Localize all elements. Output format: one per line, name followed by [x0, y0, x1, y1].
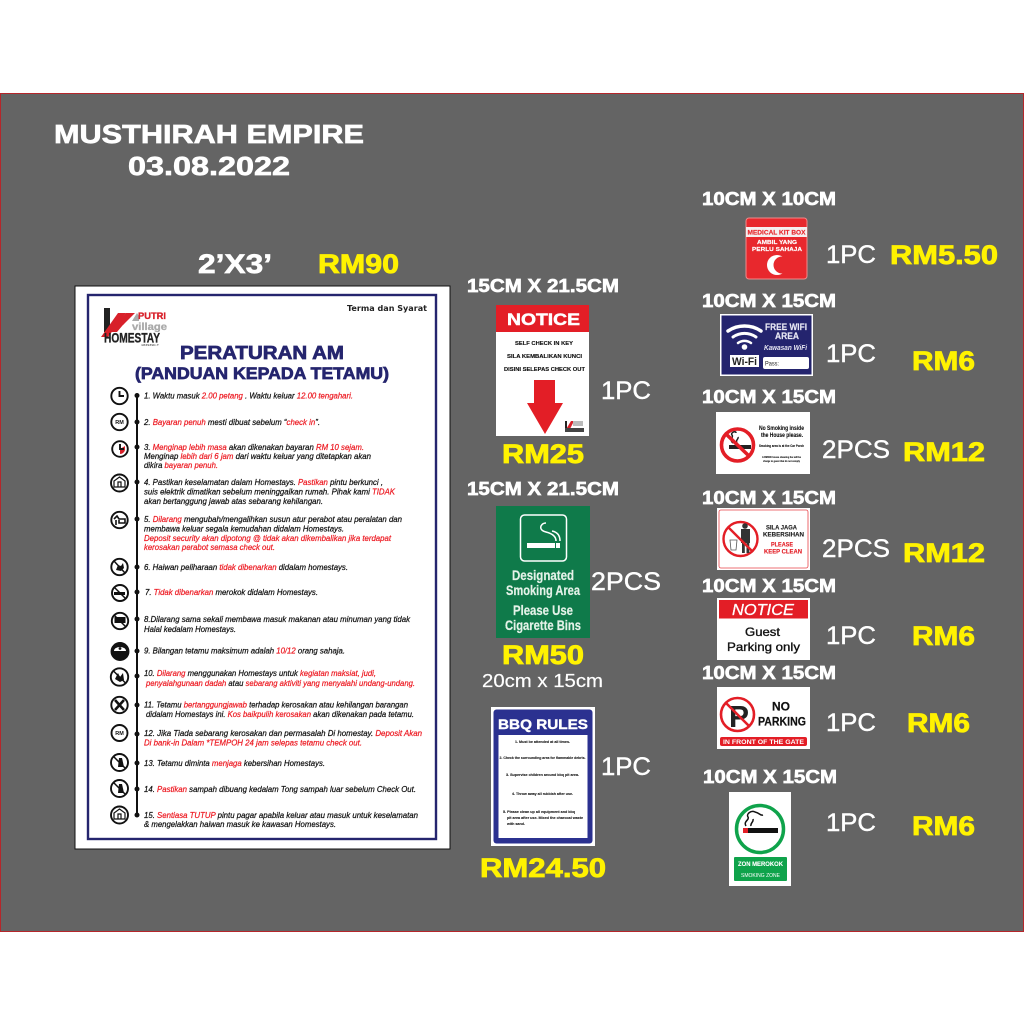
sign: designated smoking area: Smoking Area	[506, 582, 580, 598]
rule text: 9. Bilangan tetamu maksimum adalah 10/12 orang sahaja.	[144, 646, 345, 656]
heading: (PANDUAN KEPADA TETAMU)	[135, 365, 389, 383]
sign: guest parking: Parking only	[727, 640, 800, 654]
logo: HOMESTAY	[104, 330, 160, 346]
sign: keep clean: KEEP CLEAN	[764, 550, 802, 556]
rule text: Deposit security akan dipotong @ tidak akan dikembalikan jika terdapat	[144, 533, 392, 543]
rule icons	[111, 388, 128, 824]
size label: wifi: 10CM X 15CM	[702, 291, 836, 311]
qty: 1PC	[826, 340, 876, 368]
size label: check-out notice: 15CM X 21.5CM	[467, 276, 619, 296]
sign: designated smoking area	[496, 506, 590, 638]
sign: designated smoking area: Please Use	[513, 602, 573, 618]
qty: 2PCS	[591, 568, 661, 596]
rule text: penyalahgunaan dadah atau sebarang aktiviti yang menyalahi undang-undang.	[145, 678, 415, 688]
size label: smoking area: 15CM X 21.5CM	[467, 479, 619, 499]
qty: 1PC	[826, 241, 876, 269]
sign: smoking zone	[729, 792, 791, 886]
rule text: 7. Tidak dibenarkan merokok didalam Homestays.	[145, 587, 318, 597]
sign: wifi: Wi-Fi	[732, 356, 757, 368]
size label: keep clean: 10CM X 15CM	[702, 488, 836, 508]
sign: no parking	[717, 687, 810, 749]
sign: designated smoking area: Cigarette Bins	[505, 617, 581, 633]
price: poster: RM90	[318, 249, 399, 279]
price: RM6	[912, 811, 975, 841]
rule text: kerosakan perabot semasa check out.	[144, 542, 275, 552]
size label: smoking zone: 10CM X 15CM	[703, 767, 837, 787]
sign: BBQ rules: with sand.	[506, 822, 525, 826]
sign: self check-out notice: SILA KEMBALIKAN KUNCI	[507, 354, 583, 360]
rule text: 13. Tetamu diminta menjaga kebersihan Homestays.	[144, 758, 325, 768]
sign: no parking: PARKING	[758, 716, 806, 728]
size label: BBQ: 20cm x 15cm	[482, 671, 603, 691]
sign: keep clean: SILA JAGA	[766, 526, 798, 532]
size label: no parking: 10CM X 15CM	[702, 663, 836, 683]
rule text	[143, 390, 422, 829]
rule text: 4. Pastikan keselamatan dalam Homestays. Pastikan pintu berkunci ,	[144, 477, 383, 487]
logo: PUTRI	[138, 311, 166, 321]
sign: self check-out notice: SELF CHECK IN KEY	[515, 341, 574, 347]
sign: wifi: AREA	[775, 331, 799, 341]
qty: 2PCS	[822, 436, 890, 464]
rule text: 14. Pastikan sampah dibuang kedalam Tong sampah luar sebelum Check Out.	[144, 784, 416, 794]
sign: self check-out notice: DISINI SELEPAS CHECK OUT	[504, 367, 585, 373]
rule text: & mengelakkan haiwan masuk ke kawasan Homestays.	[144, 819, 336, 829]
sign: keep clean: KEBERSIHAN	[763, 532, 804, 538]
rule text: 5. Dilarang mengubah/mengalihkan susun atur perabot atau peralatan dan	[144, 514, 402, 524]
price: RM25	[502, 439, 584, 469]
sign: designated smoking area: Designated	[512, 567, 574, 583]
qty: 1PC	[826, 709, 876, 737]
sign: no smoking	[716, 412, 810, 474]
rule text: membawa keluar segala kemudahan didalam Homestays.	[144, 524, 344, 534]
timeline	[134, 393, 140, 818]
sign: smoking zone: ZON MEROKOK	[738, 861, 783, 868]
price: RM6	[912, 621, 975, 651]
sign: no smoking: the House please.	[761, 433, 803, 439]
qty: 1PC	[826, 809, 876, 837]
size label: no smoking: 10CM X 15CM	[702, 387, 836, 407]
sign: self check-out notice: NOTICE	[507, 310, 580, 329]
sign: wifi: FREE WIFI	[765, 322, 807, 332]
sign: no smoking: A RM100 house cleaning fee will be	[762, 455, 801, 459]
sign: wifi	[720, 314, 813, 376]
sign: medical kit box: MEDICAL KIT BOX	[748, 230, 806, 236]
rule text: 8.Dilarang sama sekali membawa masuk makanan atau minuman yang tidak	[144, 614, 411, 624]
rule text: suis elektrik dimatikan sebelum meninggalkan rumah. Pihak kami TIDAK	[144, 486, 396, 496]
logo: village	[132, 321, 167, 333]
sign: keep clean: PLEASE	[771, 542, 793, 548]
sign: BBQ rules	[491, 707, 595, 846]
title: 03.08.2022	[128, 151, 290, 181]
qty: 1PC	[601, 377, 651, 405]
title	[54, 119, 364, 181]
sign: medical kit box: AMBIL YANG	[757, 240, 797, 246]
sign: guest parking: Guest	[745, 625, 781, 639]
sign: no smoking: charge to guest that do not comply	[763, 459, 800, 463]
sign: BBQ rules: 5. Please clean up all equipment and bbq	[503, 810, 576, 814]
sign: no smoking: No Smoking inside	[759, 426, 805, 432]
sign: BBQ rules: BBQ RULES	[498, 716, 588, 732]
sign: guest parking	[717, 598, 810, 660]
sign: no parking: IN FRONT OF THE GATE	[723, 740, 804, 746]
rule text: Di bank-in Dalam *TEMPOH 24 jam selepas tetamu check out.	[144, 738, 362, 748]
rule text: 1. Waktu masuk 2.00 petang . Waktu keluar 12.00 tengahari.	[144, 390, 353, 400]
sign: BBQ rules: pit area after use. Mixed the charcoal waste	[507, 816, 583, 820]
rule text: akan bertanggung jawab atas sebarang kehilangan.	[144, 496, 323, 506]
price: RM12	[903, 538, 985, 568]
price: RM6	[912, 346, 975, 376]
rule text: Menginap lebih dari 6 jam dari waktu keluar yang ditetapkan akan	[144, 451, 371, 461]
sign: smoking zone: SMOKING ZONE	[741, 873, 780, 879]
qty: 1PC	[601, 753, 651, 781]
terms label: Terma dan Syarat	[347, 304, 427, 313]
sign: BBQ rules: 2. Check the surrounding area for flammable debris.	[500, 756, 586, 760]
rule text: 12. Jika Tiada sebarang kerosakan dan permasalah Di homestay. Deposit Akan	[144, 728, 422, 738]
rule text: 15. Sentiasa TUTUP pintu pagar apabila keluar atau masuk untuk keselamatan	[144, 810, 418, 820]
sign: BBQ rules: 4. Throw away all rubbish after use.	[512, 792, 573, 796]
sign: no smoking: Smoking area is at the Car Porch	[759, 444, 804, 448]
logo	[101, 308, 167, 347]
sign: keep clean	[717, 508, 810, 570]
price: RM24.50	[480, 853, 606, 883]
sign: BBQ rules: 3. Supervise children around bbq pit area.	[506, 773, 579, 777]
size label: guest parking: 10CM X 15CM	[702, 576, 836, 596]
rule text: 2. Bayaran penuh mesti dibuat sebelum “check in”.	[143, 417, 320, 427]
sign: BBQ rules: 1. Must be attended at all times.	[515, 740, 570, 744]
sign: no parking: P	[729, 699, 749, 734]
qty: 1PC	[826, 622, 876, 650]
sign: self check-out notice	[496, 305, 589, 436]
rule text: didalam Homestays ini. Kos baikpulih kerosakan akan dikenakan pada tetamu.	[146, 709, 414, 719]
sign: guest parking: NOTICE	[732, 602, 794, 619]
sign: wifi: Kawasan WiFi	[764, 343, 808, 352]
qty: 2PCS	[822, 535, 890, 563]
panel: poster rules: RM	[115, 731, 124, 737]
sign: no parking: NO	[772, 702, 790, 714]
title: MUSTHIRAH EMPIRE	[54, 119, 364, 149]
sign: medical kit box: PERLU SAHAJA	[752, 247, 802, 253]
rule text: 6. Haiwan peliharaan tidak dibenarkan didalam homestays.	[144, 562, 348, 572]
price: RM12	[903, 437, 985, 467]
size label: medical: 10CM X 10CM	[702, 189, 836, 209]
rule text: dikira bayaran penuh.	[144, 460, 218, 470]
price: RM50	[502, 640, 584, 670]
heading: PERATURAN AM	[180, 343, 344, 363]
heading	[135, 343, 389, 383]
rule text: 3. Menginap lebih masa akan dikenakan bayaran RM 10 sejam.	[144, 442, 364, 452]
rule text: 10. Dilarang menggunakan Homestays untuk kegiatan maksiat, judi,	[144, 668, 376, 678]
sign: medical kit box	[746, 218, 807, 279]
panel: poster rules	[75, 286, 450, 849]
rule text: 11. Tetamu bertanggungjawab terhadap kerosakan atau kehilangan barangan	[144, 700, 408, 710]
price: RM6	[907, 708, 970, 738]
price: RM5.50	[890, 240, 998, 270]
logo: 1839390-T	[141, 344, 160, 347]
size label: poster: 2’X3’	[198, 249, 272, 279]
rule text: Halal kedalam Homestays.	[144, 624, 236, 634]
panel: poster rules: RM	[115, 420, 124, 426]
sign: wifi: Pass:	[765, 362, 779, 368]
